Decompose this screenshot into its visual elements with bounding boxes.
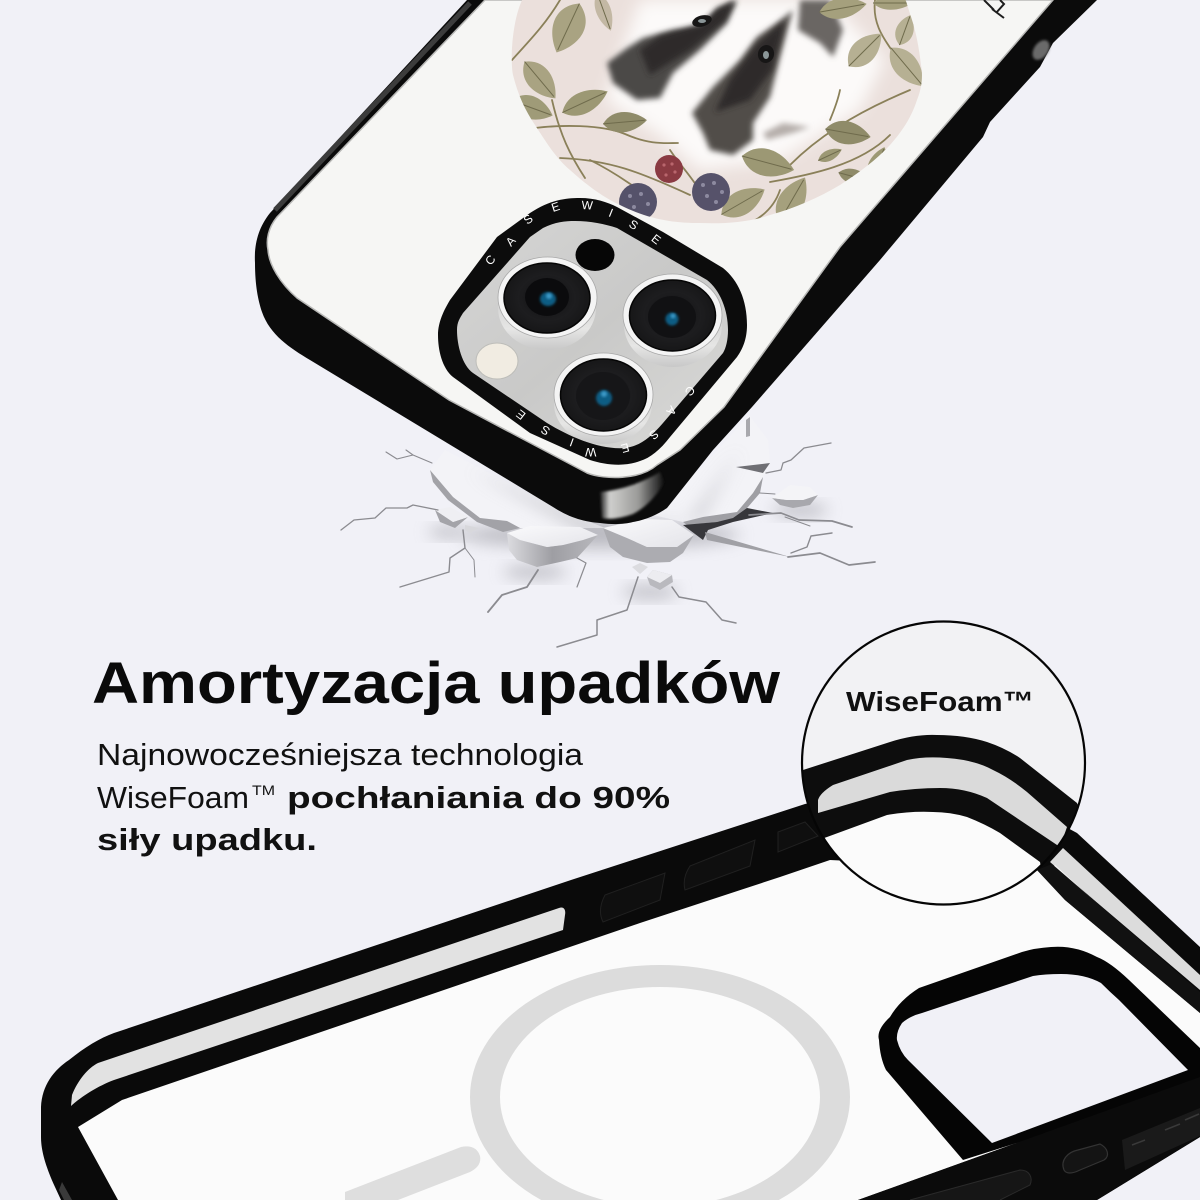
microphone hole (576, 239, 614, 271)
phone contact shadow on plates (470, 450, 740, 535)
brand ring text top: CASEWISE (482, 198, 664, 268)
far cheek stripe (798, 0, 843, 57)
lower right slab wedge (705, 532, 790, 557)
leaves (520, 0, 922, 218)
magnifier label: WiseFoam™ (846, 686, 1034, 717)
right face stripe (692, 10, 793, 155)
small pebbles (435, 485, 818, 590)
upper left rim sheen (275, 3, 470, 210)
thin white highlight beside strip (1054, 866, 1200, 1000)
foam channel left (71, 907, 565, 1106)
clear case interior (78, 860, 1200, 1200)
central shard left (507, 526, 598, 567)
magnified black bumper (803, 734, 1078, 864)
magnifier outline (802, 622, 1085, 904)
crack lines (341, 443, 875, 647)
bumper corner gloss (600, 472, 664, 519)
cropped serif letter fragment (984, 0, 1004, 18)
magsafe ring (470, 965, 850, 1200)
magnifier fill (802, 621, 1086, 905)
texture strokes (1132, 1114, 1199, 1145)
inner right strip (1037, 864, 1200, 1013)
side button gloss (1029, 37, 1053, 63)
white fur (605, 0, 885, 170)
camera cutout window (897, 974, 1188, 1143)
bottom edge band (858, 1077, 1200, 1200)
cracked ground impact (341, 415, 875, 647)
magnet bar (345, 1146, 480, 1200)
volume buttons (600, 822, 818, 922)
medallion base (505, 0, 930, 230)
side button (910, 1170, 1031, 1200)
bottom band lighter section (1122, 1108, 1200, 1170)
magnifier circle: WiseFoam (790, 621, 1090, 920)
left speaker slot (59, 1182, 72, 1200)
lower phone case (41, 770, 1200, 1200)
muzzle shading (763, 123, 810, 140)
thorny stems (512, 0, 910, 222)
trademark: TM (252, 782, 275, 798)
magnified foam channel (818, 757, 1067, 847)
body text (97, 737, 670, 857)
magnified interior (824, 812, 1040, 903)
brand ring text bottom: CASEWISE (513, 383, 698, 459)
lens top right (623, 274, 722, 356)
line 1: Najnowocześniejsza technologia (97, 737, 584, 772)
line 2 regular: WiseFoam (97, 780, 249, 815)
camera island frame (438, 198, 747, 465)
camera cutout frame (878, 947, 1200, 1160)
flash (476, 343, 518, 379)
right raised plate (640, 415, 770, 522)
black bumper (255, 0, 1097, 524)
upper phone in case (255, 0, 1097, 524)
case black frame (41, 770, 1200, 1200)
left raised plate (430, 450, 605, 528)
dark gash (683, 508, 773, 540)
lens bottom (554, 353, 653, 436)
lens top left (498, 257, 597, 338)
silver camera plateau (457, 221, 728, 448)
heading: Amortyzacja upadków (92, 651, 781, 716)
central shard right (603, 519, 694, 563)
left face stripe (607, 0, 737, 100)
magnified frame (803, 734, 1078, 903)
badger medallion (505, 0, 932, 230)
back panel (267, 0, 1053, 478)
crater soft shadows (428, 503, 828, 599)
line 2 bold: pochłaniania do 90% (287, 780, 670, 815)
line 3 bold: siły upadku. (97, 822, 317, 857)
berries (655, 155, 683, 183)
foam channel right (1050, 848, 1200, 990)
eyes (692, 15, 774, 63)
lens barrels (498, 266, 722, 444)
side port (1063, 1144, 1107, 1173)
